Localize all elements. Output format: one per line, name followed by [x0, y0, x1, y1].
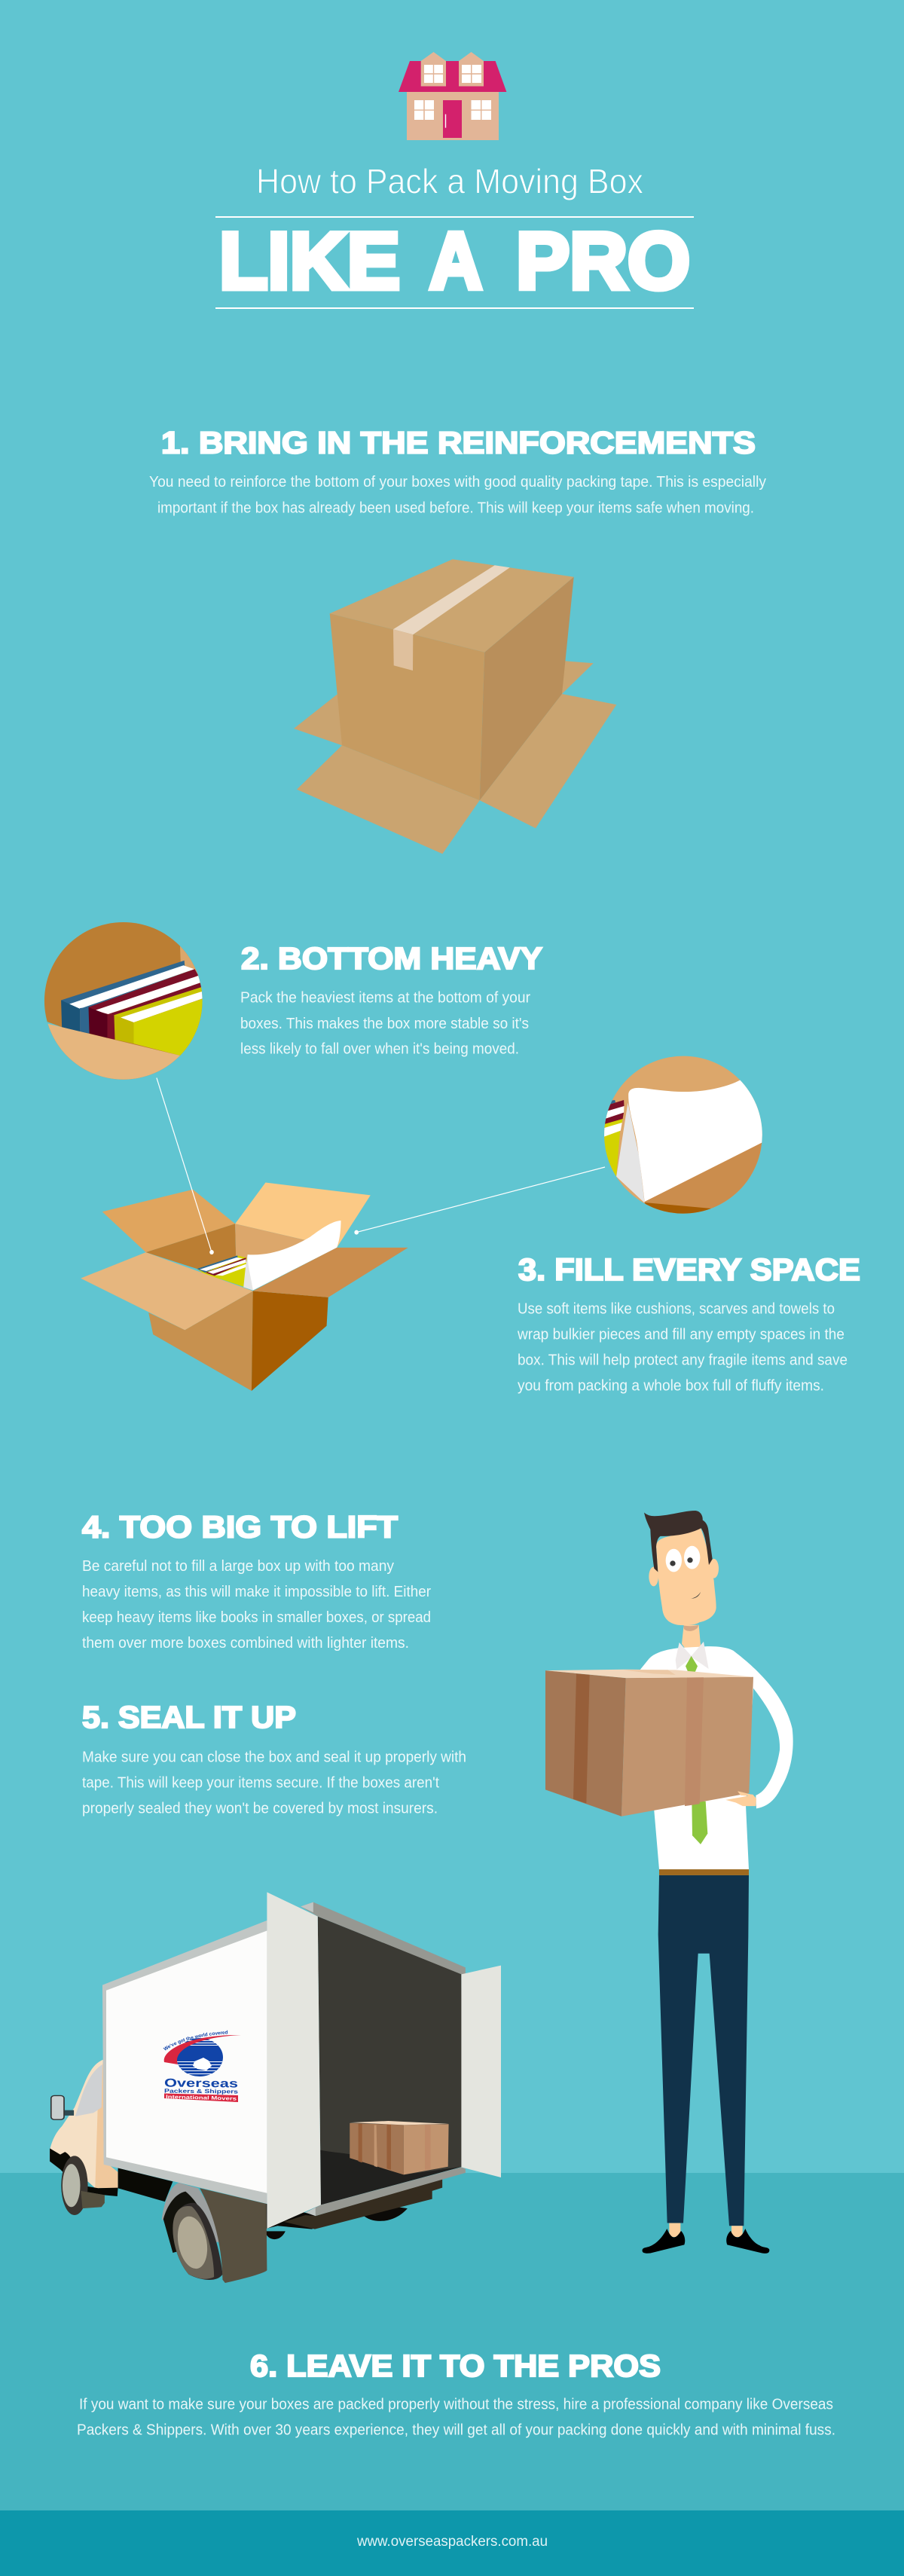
text: step 3: Use soft items like cushions, scarves and towels to — [518, 1300, 835, 1317]
connector: circle to books — [157, 1078, 214, 1254]
title rule top — [215, 216, 694, 218]
company logo: Overseas — [164, 2077, 238, 2091]
title: like a pro: LIKE — [219, 215, 400, 306]
cargo interior — [301, 1902, 466, 2216]
text: step 5: Make sure you can close the box and seal it up properly with — [82, 1749, 466, 1765]
open doors — [267, 1892, 321, 2229]
text: step 5 — [82, 1749, 466, 1817]
floor band — [0, 2173, 904, 2510]
title: like a pro — [219, 215, 690, 306]
text: step 2 — [240, 990, 530, 1058]
text: step 6 — [77, 2397, 835, 2439]
text: step 1 — [149, 474, 766, 517]
cargo body — [102, 1921, 267, 2204]
icon: house — [399, 52, 506, 140]
heading 1: 1. BRING IN THE REINFORCEMENTS — [161, 425, 756, 460]
heading 4: 4. TOO BIG TO LIFT — [82, 1510, 398, 1545]
text: step 1: You need to reinforce the bottom of your boxes with good quality packing tape. This is especially — [149, 474, 766, 490]
text: step 3: wrap bulkier pieces and fill any empty spaces in the — [517, 1326, 844, 1343]
upper body — [545, 1511, 793, 1875]
tape — [393, 565, 510, 671]
text: step 4: them over more boxes combined with lighter items. — [82, 1635, 409, 1652]
company logo: We've got the world covered — [163, 2030, 228, 2051]
truck cab — [50, 2060, 118, 2215]
company logo — [163, 2030, 241, 2102]
text: step 3: you from packing a whole box full of fluffy items. — [518, 1377, 824, 1394]
text: step 6: Packers & Shippers. With over 30 years experience, they will get all of your packing done quickly and with minimal fuss. — [77, 2422, 835, 2439]
footer band — [0, 2510, 904, 2576]
company logo: International Movers — [166, 2095, 237, 2102]
title: like a pro: A — [429, 215, 482, 306]
heading 3: 3. FILL EVERY SPACE — [518, 1252, 860, 1287]
connector: circle to towel — [354, 1167, 605, 1235]
text: step 4 — [82, 1558, 431, 1652]
illustration: taped box on open flaps — [294, 559, 616, 854]
illustration: open box with books and towel — [81, 1183, 408, 1391]
carried box — [545, 1670, 753, 1817]
company logo: Packers & Shippers — [164, 2088, 238, 2095]
heading 5: 5. SEAL IT UP — [82, 1700, 296, 1734]
magnifier circle: books — [44, 922, 203, 1080]
rear wheel — [162, 2183, 267, 2283]
text: step 5: tape. This will keep your items secure. If the boxes aren't — [82, 1774, 439, 1791]
heading 6: 6. LEAVE IT TO THE PROS — [250, 2348, 661, 2383]
legs and shoes — [643, 1875, 769, 2254]
heading 2: 2. BOTTOM HEAVY — [241, 941, 542, 976]
mini books — [197, 1255, 246, 1288]
text: step 2: Pack the heaviest items at the bottom of your — [240, 990, 530, 1007]
text: step 6: If you want to make sure your boxes are packed properly without the stress, hire a professional company like Overseas — [79, 2397, 833, 2413]
title: like a pro: PRO — [516, 215, 690, 306]
magnifier circle: soft items — [599, 1053, 766, 1218]
text: step 4: keep heavy items like books in smaller boxes, or spread — [82, 1609, 431, 1626]
footer url: www.overseaspackers.com.au — [356, 2534, 548, 2550]
title: how to pack a moving box: How to Pack a Moving Box — [256, 161, 643, 200]
title rule bottom — [215, 307, 694, 309]
text: step 4: heavy items, as this will make it impossible to lift. Either — [82, 1584, 431, 1600]
illustration: moving truck — [50, 1893, 835, 2550]
towel — [243, 1221, 341, 1291]
illustration: man holding box — [545, 1511, 793, 2254]
text: step 3: box. This will help protect any fragile items and save — [518, 1352, 848, 1368]
text: step 5: properly sealed they won't be covered by most insurers. — [82, 1800, 438, 1817]
text: step 3 — [517, 1300, 848, 1394]
text: step 2: less likely to fall over when it's being moved. — [240, 1041, 519, 1058]
text: step 2: boxes. This makes the box more stable so it's — [240, 1016, 529, 1032]
text: step 1: important if the box has already been used before. This will keep your items safe when moving. — [157, 500, 754, 517]
text: step 4: Be careful not to fill a large box up with too many — [82, 1558, 394, 1575]
box inside truck — [350, 2121, 449, 2174]
